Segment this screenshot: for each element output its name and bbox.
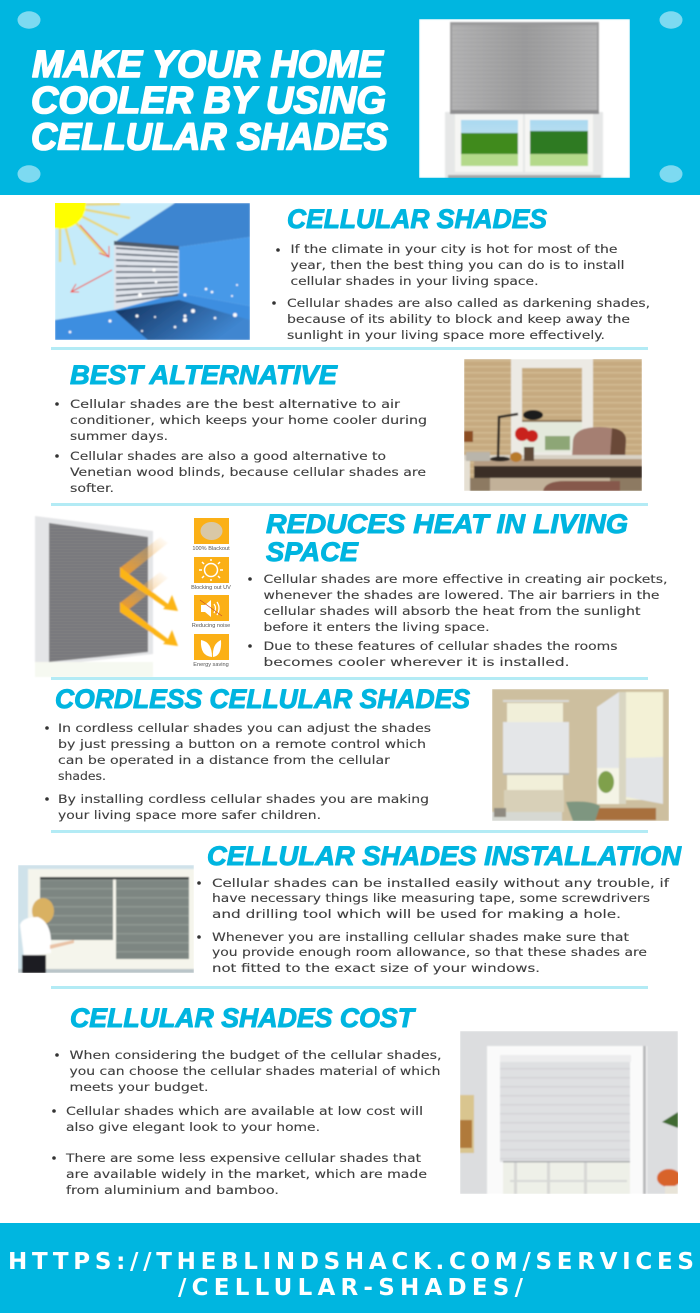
icon: energy saving: [193, 634, 229, 668]
url text: [8, 1249, 694, 1301]
bullet list: can be operated in a distance from the cellular: [58, 753, 390, 767]
heading: [266, 509, 628, 567]
bullet list: Cellular shades are more effective in creating air pockets,: [264, 572, 668, 586]
title: COOLER BY USING: [31, 80, 386, 122]
bullet list: By installing cordless cellular shades you are making: [58, 792, 429, 806]
heading: CELLULAR SHADES: [287, 204, 547, 234]
bullet list: cellular shades in your living space.: [290, 274, 538, 288]
bullet list: There are some less expensive cellular shades that: [65, 1151, 422, 1165]
image: white blind on window: [460, 1031, 678, 1194]
bullet list: [55, 397, 427, 495]
heading: SPACE: [266, 537, 359, 567]
section: cordless cellular shades: [45, 684, 669, 822]
icon: reducing noise: [192, 595, 230, 629]
title: CELLULAR SHADES: [31, 116, 388, 158]
icon: reducing noise: Reducing noise: [192, 623, 230, 629]
image: grey shade on window: [419, 19, 630, 178]
bullet list: Whenever you are installing cellular shades make sure that: [212, 930, 630, 944]
bullet list: Cellular shades are also called as darkening shades,: [287, 296, 650, 310]
url text: HTTPS://THEBLINDSHACK.COM/SERVICES: [8, 1249, 694, 1275]
bullet list: Cellular shades are the best alternative to air: [70, 397, 400, 411]
icon: 100% blackout: 100% Blackout: [192, 546, 230, 552]
bullet list: becomes cooler wherever it is installed.: [264, 655, 570, 669]
header banner: [0, 0, 700, 195]
bullet list: Venetian wood blinds, because cellular shades are: [70, 465, 426, 479]
title: MAKE YOUR HOME: [32, 44, 385, 86]
footer banner: [0, 1223, 700, 1313]
bullet list: Cellular shades which are available at low cost will: [66, 1104, 423, 1118]
heading: CELLULAR SHADES COST: [70, 1003, 416, 1033]
bullet list: summer days.: [70, 429, 168, 443]
bullet list: cellular shades will absorb the heat from the sunlight: [264, 604, 641, 618]
section: cellular shades: [36, 179, 650, 342]
url text: /CELLULAR-SHADES/: [178, 1275, 524, 1301]
bullet list: shades.: [58, 769, 106, 783]
bullet list: [248, 572, 667, 669]
icon: 100% blackout: [192, 518, 230, 552]
bullet list: your living space more safer children.: [58, 808, 321, 822]
bullet list: and drilling tool which will be used for making a hole.: [212, 907, 621, 921]
bullet list: conditioner, which keeps your home cooler during: [70, 413, 427, 427]
bullet list: Cellular shades are also a good alternative to: [70, 449, 386, 463]
bullet list: not fitted to the exact size of your windows.: [212, 961, 540, 975]
section: reduces heat: [35, 509, 668, 677]
bullet list: year, then the best thing you can do is to install: [290, 258, 624, 272]
bullet list: softer.: [70, 481, 114, 495]
icon: energy saving: Energy saving: [193, 662, 229, 668]
bullet list: If the climate in your city is hot for most of the: [290, 242, 618, 256]
bullet list: [272, 242, 650, 342]
image: woman at grey shades: [18, 865, 194, 973]
bullet list: before it enters the living space.: [264, 620, 490, 634]
bullet list: [197, 876, 670, 975]
bullet list: by just pressing a button on a remote control which: [58, 737, 426, 751]
bullet list: [45, 721, 431, 822]
section: best alternative: [55, 359, 642, 495]
image: room with white shades: [492, 689, 669, 821]
bullet list: meets your budget.: [70, 1080, 208, 1094]
bullet list: from aluminium and bamboo.: [66, 1183, 279, 1197]
bullet list: Due to these features of cellular shades the rooms: [264, 639, 618, 653]
bullet list: you provide enough room allowance, so that these shades are: [212, 945, 647, 959]
bullet list: have necessary things like measuring tape, some screwdrivers: [212, 891, 650, 905]
heading: CELLULAR SHADES INSTALLATION: [207, 841, 682, 871]
heading: CORDLESS CELLULAR SHADES: [55, 684, 470, 714]
bullet list: Cellular shades can be installed easily without any trouble, if: [212, 876, 670, 890]
bullet list: When considering the budget of the cellular shades,: [70, 1048, 442, 1062]
bullet list: In cordless cellular shades you can adjust the shades: [58, 721, 431, 735]
bullet list: also give elegant look to your home.: [66, 1120, 320, 1134]
decorative corner dots: [18, 11, 682, 183]
bullet list: because of its ability to block and keep away the: [287, 312, 630, 326]
section: cost: [52, 1003, 681, 1197]
bullet list: you can choose the cellular shades material of which: [70, 1064, 440, 1078]
heading: BEST ALTERNATIVE: [70, 360, 338, 390]
bullet list: sunlight in your living space more effectively.: [287, 328, 605, 342]
section: installation: [18, 841, 682, 975]
image: study with tan shades: [464, 359, 642, 491]
bullet list: are available widely in the market, which are made: [66, 1167, 427, 1181]
icon: blocking out UV: [191, 557, 231, 591]
bullet list: [52, 1048, 442, 1197]
icon: blocking out UV: Blocking out UV: [191, 585, 231, 591]
image: sun and shade diagram: [55, 203, 250, 340]
heading: REDUCES HEAT IN LIVING: [266, 509, 628, 539]
bullet list: whenever the shades are lowered. The air barriers in the: [264, 588, 660, 602]
image: shade window with arrows: [35, 516, 231, 677]
title: [31, 44, 388, 158]
